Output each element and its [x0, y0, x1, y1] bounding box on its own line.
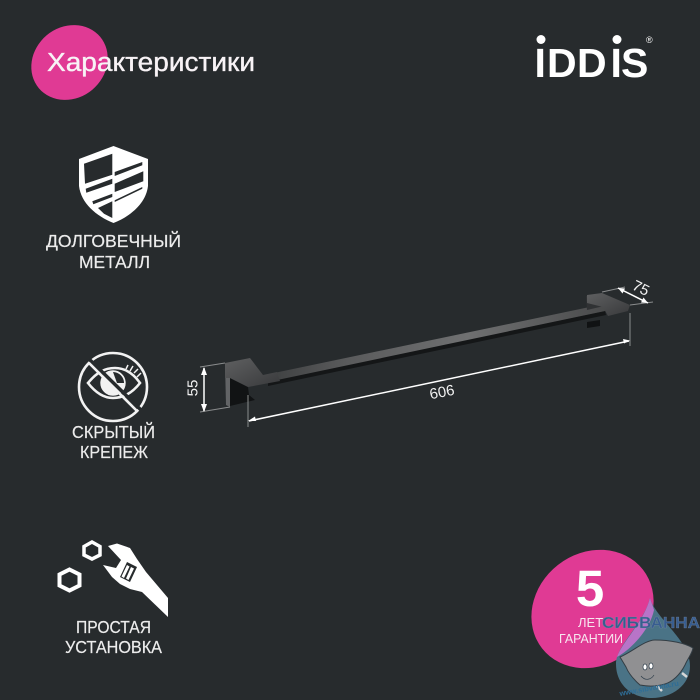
logo: IDDIS: IDDIS: [534, 40, 648, 86]
label: hidden fasteners line 1: СКРЫТЫЙ: [72, 421, 155, 442]
heading text: Характеристики: [47, 49, 255, 77]
bar shadow underside: [268, 311, 606, 386]
pink blob: [508, 525, 677, 693]
heading: Характеристики: [16, 10, 255, 115]
bar: [262, 304, 605, 383]
warranty text second line: ГАРАНТИИ: [559, 631, 623, 646]
tub face: [641, 663, 654, 679]
left bracket: [225, 358, 280, 407]
label: hidden fasteners line 2: КРЕПЕЖ: [80, 442, 148, 462]
dimension: 75: [602, 277, 653, 305]
right bracket: [586, 293, 630, 328]
dimension: 55: [184, 363, 230, 412]
label: easy installation line 2: УСТАНОВКА: [65, 637, 162, 657]
dimension: 606: [248, 313, 630, 427]
tub feet: [657, 673, 687, 691]
feature: easy installation: [60, 542, 168, 657]
label: easy installation line 1: ПРОСТАЯ: [76, 617, 151, 637]
label: durable metal line 2: МЕТАЛЛ: [79, 252, 150, 272]
number 5: 5: [576, 560, 604, 617]
pink blob behind heading: [16, 10, 123, 115]
feature: durable metal: [46, 146, 181, 272]
towel bar product: [225, 293, 630, 407]
tub: [620, 640, 693, 686]
label: durable metal line 1: ДОЛГОВЕЧНЫЙ: [46, 230, 181, 251]
watermark: sibvanna: [602, 598, 700, 698]
warranty badge: [508, 525, 677, 693]
watermark url: www.sibvanna.ru: [618, 679, 680, 698]
warranty text: ЛЕТ: [578, 615, 603, 630]
drop overlap with badge: [617, 598, 654, 657]
icon: shield: [79, 146, 148, 223]
watermark name: СИБВАННА: [602, 615, 700, 632]
drop: [616, 598, 690, 698]
dimension: 75: 75: [630, 277, 652, 300]
icon: wrench and nuts: [60, 542, 168, 617]
icon: crossed out eye: [79, 353, 147, 421]
logo: IDDIS: ®: [646, 35, 653, 45]
dimension: 55: 55: [184, 380, 202, 396]
feature: hidden fasteners: [72, 353, 155, 462]
dimension: 606: 606: [428, 382, 456, 403]
